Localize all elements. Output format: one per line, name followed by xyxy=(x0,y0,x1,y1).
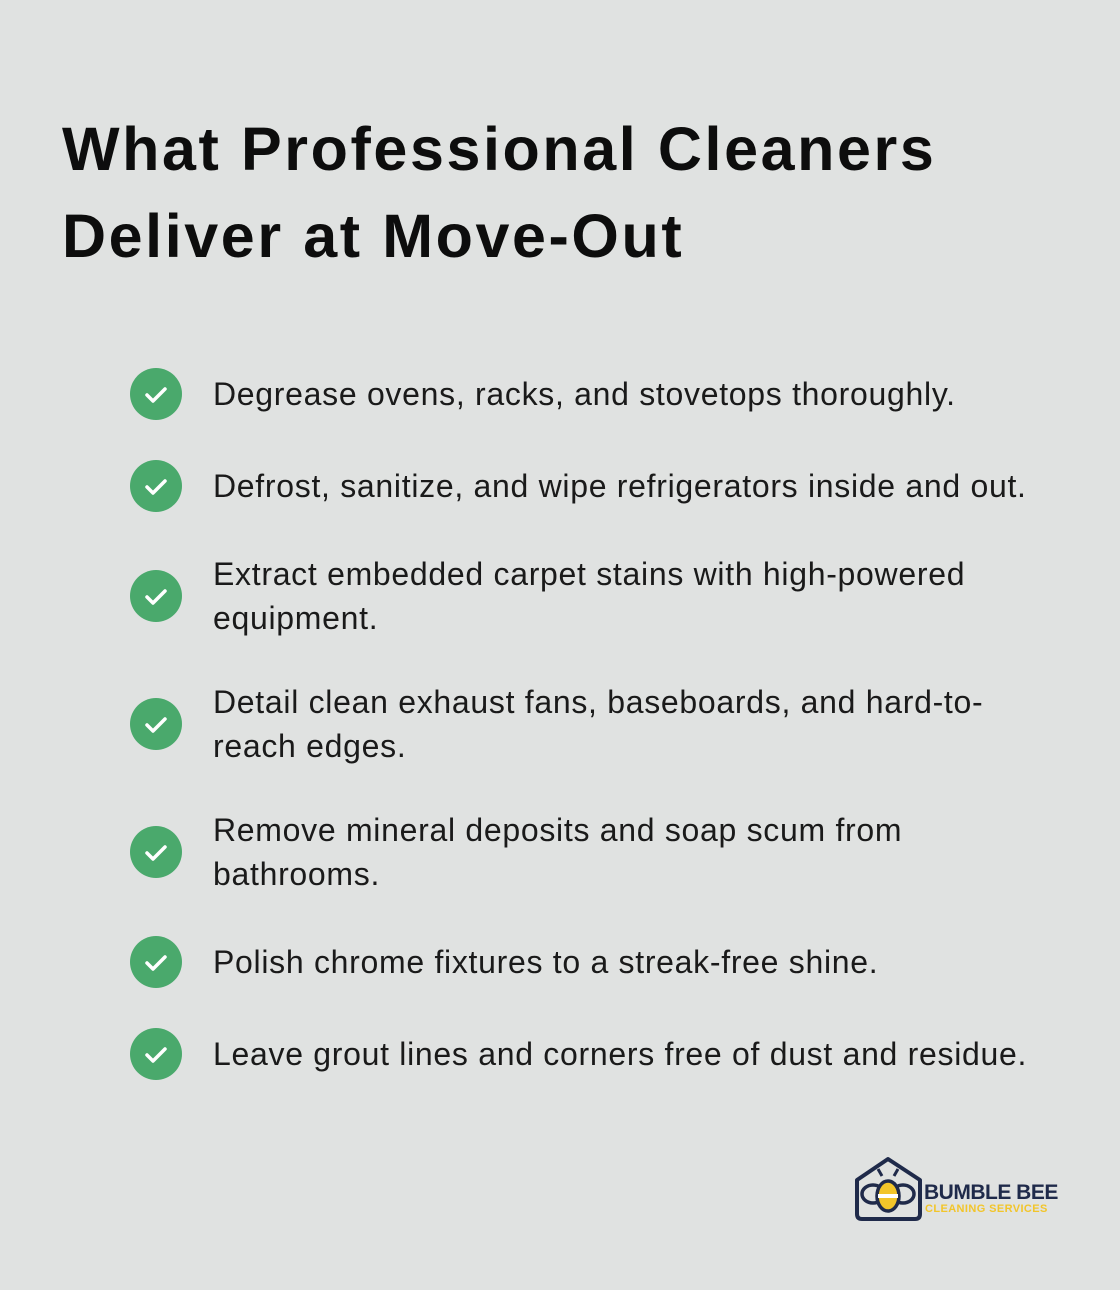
item: ovens xyxy=(130,368,956,420)
text: Leave grout lines and corners free of dust and residue. xyxy=(213,1036,1027,1072)
icon: check xyxy=(130,1028,182,1080)
item: bathrooms xyxy=(130,812,902,892)
text: brand: BUMBLE BEE xyxy=(924,1181,1058,1204)
icon: check xyxy=(130,698,182,750)
text: Defrost, sanitize, and wipe refrigerators inside and out. xyxy=(213,468,1027,504)
text: bathrooms. xyxy=(213,856,380,892)
title: What Professional Cleaners xyxy=(62,115,936,183)
text: equipment. xyxy=(213,600,378,636)
text: Extract embedded carpet stains with high-powered xyxy=(213,556,965,592)
text xyxy=(213,684,983,764)
text: Degrease ovens, racks, and stovetops thoroughly. xyxy=(213,376,956,412)
icon: check xyxy=(130,368,182,420)
text xyxy=(213,556,965,636)
title: Deliver at Move-Out xyxy=(62,202,684,270)
text: Detail clean exhaust fans, baseboards, and hard-to- xyxy=(213,684,983,720)
title xyxy=(62,115,936,270)
text: tagline: CLEANING SERVICES xyxy=(925,1203,1048,1215)
item: exhaust fans xyxy=(130,684,983,764)
text xyxy=(213,812,902,892)
logo xyxy=(855,1157,1058,1221)
item: chrome xyxy=(130,936,878,988)
text: Polish chrome fixtures to a streak-free shine. xyxy=(213,944,878,980)
text: Remove mineral deposits and soap scum from xyxy=(213,812,902,848)
text: reach edges. xyxy=(213,728,406,764)
item: grout xyxy=(130,1028,1027,1080)
icon: check xyxy=(130,570,182,622)
icon: bee house xyxy=(855,1157,922,1221)
item: carpet xyxy=(130,556,965,636)
icon: check xyxy=(130,826,182,878)
item: refrigerators xyxy=(130,460,1027,512)
icon: check xyxy=(130,936,182,988)
icon: check xyxy=(130,460,182,512)
